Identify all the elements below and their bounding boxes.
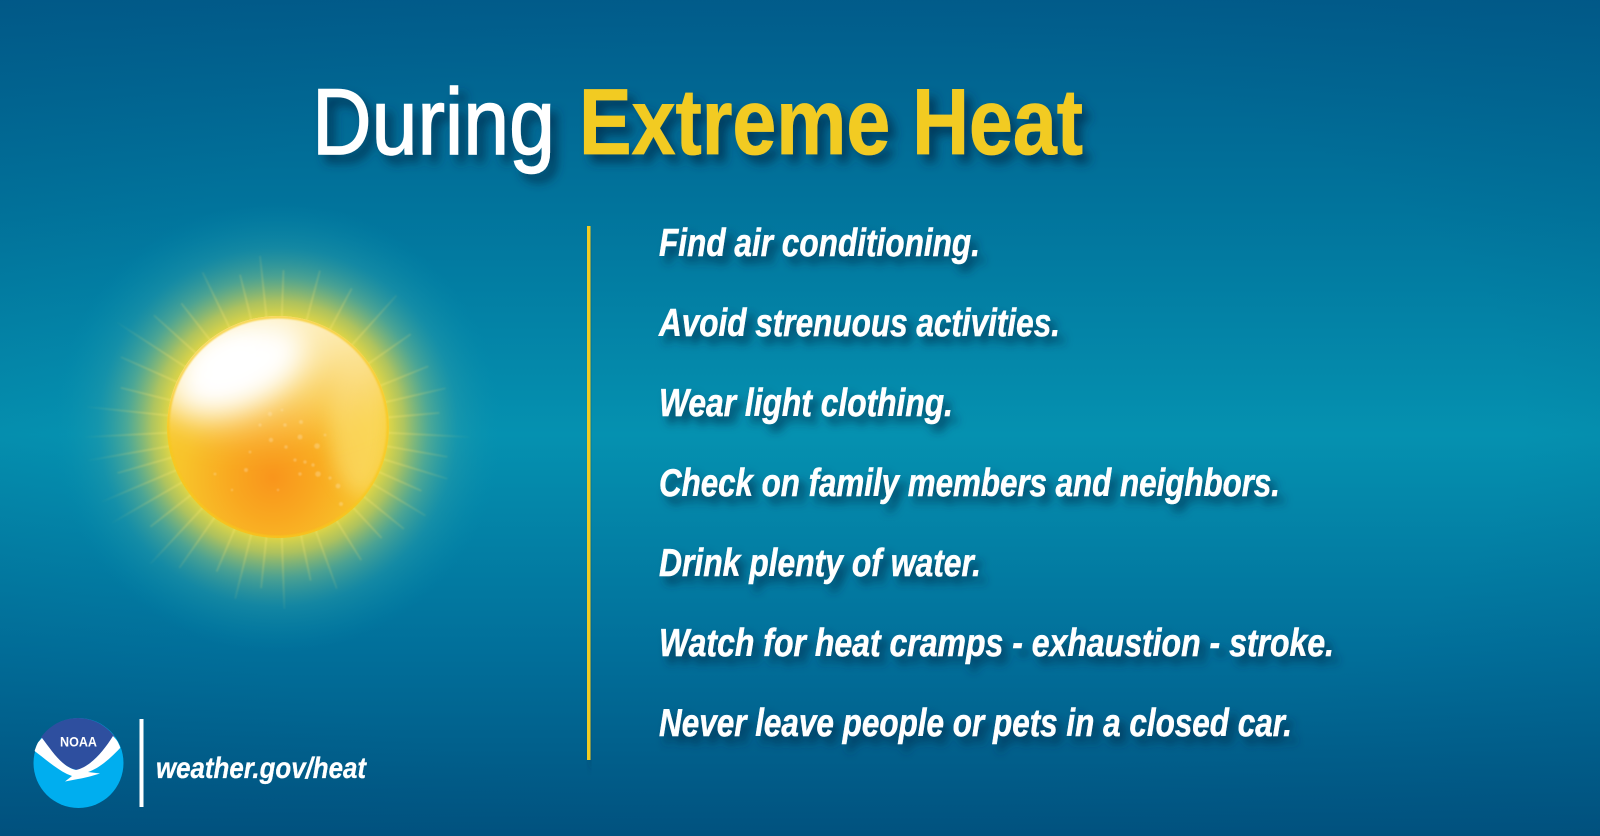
speckles [214,409,343,506]
divider: vertical gold line [587,226,590,760]
tip: air conditioning: Find air conditioning. [659,222,980,265]
title: During [312,69,555,174]
tip: closed car: Never leave people or pets in a closed car. [659,702,1292,745]
title [312,69,1083,174]
link text: weather.gov/heat [156,752,368,785]
tip: heat illness: Watch for heat cramps - exhaustion - stroke. [659,622,1334,665]
icon: NOAA logo: NOAA [60,734,97,750]
icon: sun [85,230,471,626]
tip: light clothing: Wear light clothing. [659,382,953,425]
sun rays [84,256,470,609]
title: Extreme Heat [579,69,1083,174]
icon: NOAA logo [34,718,124,808]
tip: check on family: Check on family members and neighbors. [659,462,1280,505]
divider: logo separator [140,719,144,807]
tip: strenuous activities: Avoid strenuous activities. [658,302,1060,345]
tip: drink water: Drink plenty of water. [659,542,981,585]
list of safety tips [658,222,1334,745]
sun disc [167,316,389,538]
